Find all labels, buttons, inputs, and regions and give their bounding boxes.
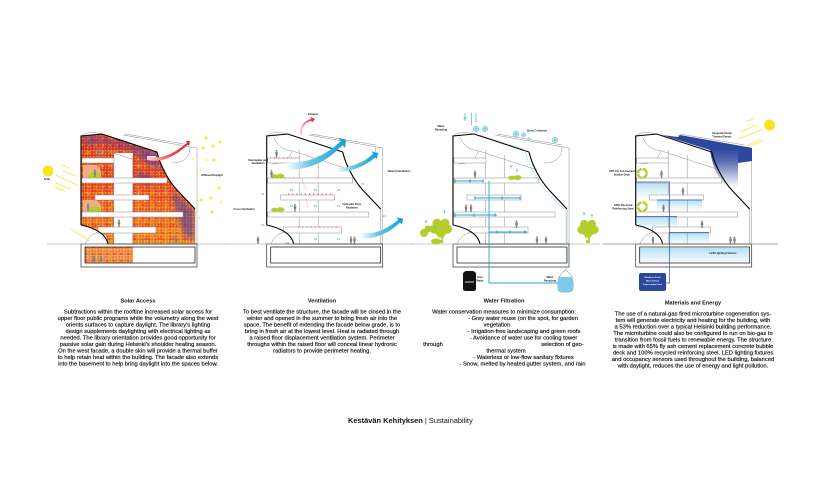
text block: solar access: design supplements daylighting with electrical lighting as: [65, 329, 211, 335]
text block: solar access: orients surfaces to capture daylight. The library's lighting: [66, 322, 210, 328]
pipe ticks: [455, 180, 525, 234]
blue callout box: Microturbine: [646, 280, 660, 282]
labels: Recycling: [435, 128, 448, 132]
icon: recycling: [638, 202, 647, 211]
black water tank: [463, 271, 476, 291]
text block: materials and energy: deck and 100% recycled reinforcing steel. LED lighting fixtures: [613, 350, 773, 356]
labels: Hydraulic Floor: [342, 202, 362, 206]
ground line: [225, 243, 412, 245]
labels: Integrated Solar: [712, 131, 732, 135]
sun rays: [54, 165, 90, 241]
ground line: [47, 243, 227, 245]
text block: ventilation: throughs within the raised floor will conceal linear hydronic: [247, 342, 397, 348]
text block: solar access: Subtractions within the rooftine increased solar access for: [64, 310, 212, 316]
water storage tank: [558, 270, 573, 292]
green roof: [508, 175, 522, 180]
ground line: [410, 243, 600, 245]
text block: water filtration: vegetation: [484, 322, 510, 328]
text block: materials and energy: tem will generate electricity and heating for the building, with: [616, 318, 770, 324]
text block: water filtration: Water conservation measures to minimize consumption:: [432, 310, 576, 316]
building section: [267, 132, 383, 267]
red radiator dashes: [270, 158, 340, 227]
evaporation drops: [425, 166, 593, 230]
text block: solar access: Solar Access: [121, 298, 155, 304]
labels: Ventilation: [251, 161, 265, 165]
labels: [435, 124, 557, 282]
labels: Grey: [477, 275, 484, 279]
labels: Radiators: [346, 206, 359, 210]
text block: solar access: to help retain heat within the building. The facade also extends: [58, 355, 218, 361]
labels: [609, 131, 737, 255]
text block: ventilation: radiators to provide perimeter heating.: [273, 348, 371, 354]
text block: materials and energy: Materials and Energy: [665, 300, 722, 306]
labels: Water: [437, 124, 445, 128]
text block: ventilation: bring in fresh air at the lowest level. Heat is radiated through: [245, 329, 399, 335]
arrow: lower air flow: [360, 218, 403, 238]
glow under slabs: [636, 183, 749, 264]
text block: ventilation: [243, 298, 401, 354]
panel: ventilation diagram: [225, 112, 412, 267]
text block: materials and energy: transition from fossil fuels to renewable energy. The structure: [615, 338, 771, 344]
labels: LED Lighting Fixtures: [710, 251, 737, 255]
arrow: reflected solar: [147, 141, 190, 161]
white column and floor slabs: [81, 132, 197, 267]
labels: 65% Fly Ash Cement: [609, 169, 635, 173]
panel: materials and energy diagram: [603, 119, 778, 291]
ground line: [603, 243, 778, 245]
rain and snow icons: [464, 113, 558, 143]
labels: Bubble Deck: [614, 172, 630, 176]
text block: materials and energy: The microturbine could also be configured to run on bio-gas to: [613, 331, 773, 337]
text block: water filtration: - Irrigation-free landscaping and green roofs: [468, 329, 580, 335]
heat map over building section: [78, 130, 198, 263]
facade glow: [710, 148, 738, 187]
people: [87, 150, 177, 263]
labels: Stormwater and: [248, 158, 268, 162]
text block: solar access: passive solar gain during Helsinki's shoulder heating season.: [60, 342, 217, 348]
labels: Exhaust: [308, 112, 318, 116]
text block: ventilation: winter and opened in the summer to bring fresh air into the: [246, 316, 397, 322]
panel: water filtration diagram: [410, 113, 600, 292]
text block: ventilation: Ventilation: [308, 298, 337, 304]
small air flow ticks: [261, 184, 386, 243]
text block: solar access: [58, 298, 219, 368]
diffused daylight stars: [192, 136, 223, 219]
building section: [636, 132, 752, 267]
gutter water line: [480, 135, 566, 270]
text block: water filtration: thermal system: [486, 348, 526, 354]
text block: materials and energy: a 53% reduction over a typical Helsinki building performance.: [615, 324, 772, 330]
text block: water filtration: - Grey water reuse (on the spot, for garden: [468, 316, 578, 322]
blue callout box: Biodiesel Fired: [645, 277, 661, 279]
people: [257, 150, 356, 244]
arrow: exhaust: [300, 117, 315, 135]
labels: [233, 112, 411, 211]
text block: solar access: upper floor public programs while the volumetry along the west: [58, 316, 219, 322]
panel: solar access diagram: [43, 130, 227, 267]
labels: Water: [546, 275, 554, 279]
labels: 100% Recycled: [614, 203, 633, 207]
text block: ventilation: a raised floor displacement ventilation system. Perimeter: [249, 336, 395, 342]
blue photovoltaic roof: [662, 135, 752, 163]
text block: water filtration: Water Filtration: [484, 298, 525, 304]
labels: Recycling: [544, 278, 557, 282]
arrow: mid air flow: [336, 152, 378, 172]
labels: Thermal Panels: [712, 134, 732, 138]
label: solar: Solar: [44, 177, 50, 181]
text block: water filtration: through: [423, 342, 443, 348]
people: [465, 170, 547, 244]
sun rays: [739, 119, 763, 146]
text block: water filtration: - Avoidance of water use for cooling tower: [470, 336, 577, 342]
text block: water filtration: - Waterless or low-flow sanitary fixtures: [473, 355, 574, 361]
icon: recycling: [638, 169, 647, 178]
text block: solar access: On the west facade, a double skin will provide a thermal buffer: [58, 348, 218, 354]
icon: sun: [764, 120, 775, 130]
blue callout box: Cogeneration Heat: [643, 283, 662, 286]
trees: [420, 219, 599, 244]
blue callout box: [639, 273, 666, 291]
text block: ventilation: To best ventilate the structure, the facade will be closed in the: [243, 310, 401, 316]
arrow: upper air flow: [286, 138, 346, 170]
labels: Snow Collection: [527, 128, 547, 132]
text block: materials and energy: and occupancy sensors used throughout the building, balanced: [612, 357, 774, 363]
labels: Reinforcing Steel: [612, 206, 634, 210]
text block: water filtration: [423, 298, 586, 368]
text block: materials and energy: [612, 300, 774, 370]
label: diffused daylight: Diffused Daylight: [201, 173, 223, 177]
green planting: [271, 174, 284, 212]
text block: materials and energy: with daylight, reduces the use of energy and light pollution.: [617, 364, 769, 370]
text block: solar access: needed. The library orientation provides good opportunity for: [60, 336, 216, 342]
icon: sun: [43, 166, 53, 176]
people: [652, 170, 736, 244]
labels: Water: [476, 278, 484, 282]
text block: ventilation: space. The benefit of extending the facade below grade, is to: [244, 322, 400, 328]
text block: solar access: into the basement to help bring daylight into the spaces below.: [58, 362, 218, 368]
text block: materials and energy: The use of a natural-gas fired microturbine cogeneration sys-: [615, 312, 771, 318]
text block: water filtration: - Snow, melted by heated gutter system, and rain: [460, 362, 586, 368]
text block: water filtration: selection of geo-: [541, 342, 584, 348]
footer title: Kestävän Kehityksen | Sustainability: [348, 416, 473, 425]
text block: materials and energy: is made with 65% fly ash cement replacement concrete bubble: [613, 344, 773, 350]
blue conduit: [636, 182, 709, 283]
water pipes: [455, 181, 558, 283]
labels: Cross Ventilation: [233, 207, 255, 211]
labels: Natural Ventilation: [388, 169, 411, 173]
building section: [453, 132, 569, 267]
